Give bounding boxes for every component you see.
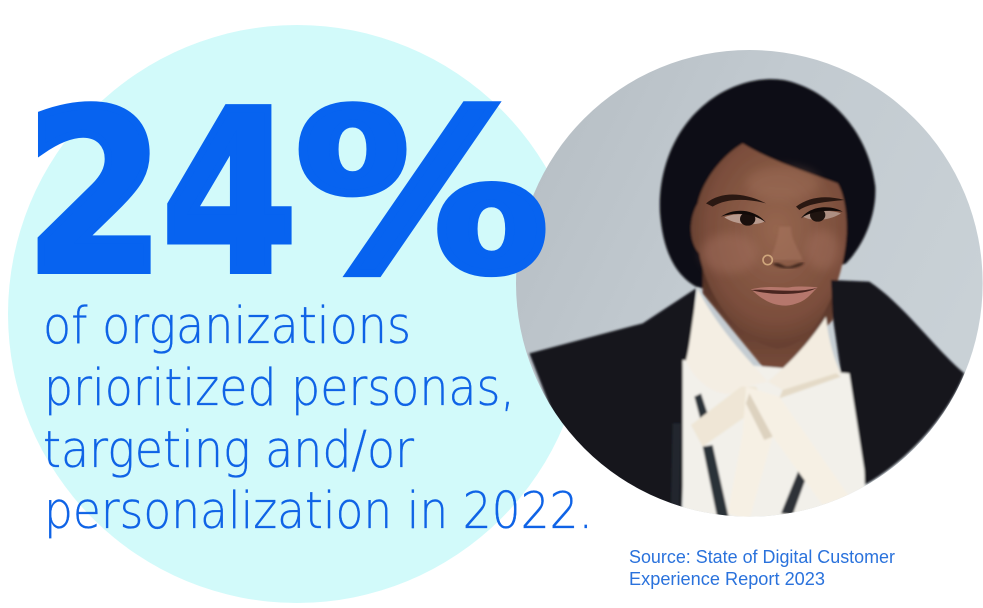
source note: Source: State of Digital Customer xyxy=(629,547,895,567)
facial features xyxy=(701,167,844,306)
headline stat: 2 xyxy=(25,65,164,323)
source note: Experience Report 2023 xyxy=(629,569,825,589)
background circle xyxy=(8,25,586,603)
source note xyxy=(629,547,895,589)
description text: personalization in 2022. xyxy=(44,482,593,541)
headline stat xyxy=(25,65,549,323)
description text: prioritized personas, xyxy=(44,359,515,418)
description text: of organizations xyxy=(43,297,411,356)
description text xyxy=(43,297,593,541)
headline stat: 4 xyxy=(162,65,297,323)
headline stat: % xyxy=(295,65,549,323)
photo: portrait of a woman xyxy=(516,40,983,520)
description text: targeting and/or xyxy=(43,421,414,480)
